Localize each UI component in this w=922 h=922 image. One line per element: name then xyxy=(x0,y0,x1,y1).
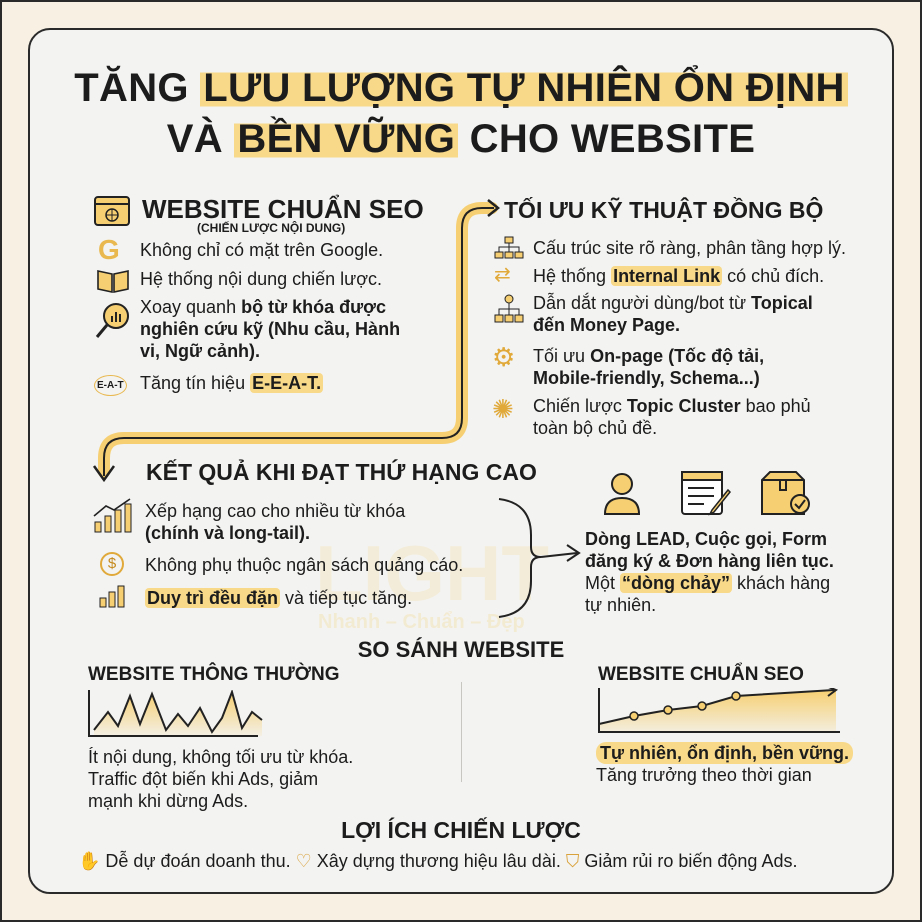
panel: kết quả: Không phụ thuộc ngân sách quảng cáo. xyxy=(145,555,463,575)
brace arrow xyxy=(498,498,581,618)
panel: website chuẩn seo compare: Tăng trưởng theo thời gian xyxy=(596,765,812,785)
panel: website chuẩn seo: vi, Ngữ cảnh). xyxy=(140,341,260,361)
panel: website thông thường: WEBSITE THÔNG THƯỜNG xyxy=(88,664,340,685)
panel: kết quả: Xếp hạng cao cho nhiều từ khóa xyxy=(145,501,405,521)
icon: small bars xyxy=(100,586,124,608)
heading: WEBSITE CHUẨN SEO xyxy=(142,194,424,224)
text: lead result: đăng ký & Đơn hàng liên tục. xyxy=(585,551,834,571)
panel: website thông thường xyxy=(88,662,353,811)
panel: website thông thường: mạnh khi dừng Ads. xyxy=(88,791,248,811)
panel: kết quả: (chính và long-tail). xyxy=(145,523,310,543)
icon: arrows: ⇄ xyxy=(494,264,511,286)
text: lead result: tự nhiên. xyxy=(585,595,656,615)
icon: hierarchy xyxy=(494,294,524,322)
panel: tối ưu kỹ thuật xyxy=(492,197,846,438)
icon: dollar: $ xyxy=(108,555,116,572)
benefits row: ✋ Dễ dự đoán doanh thu. ♡ Xây dựng thương hiệu lâu dài. ⛉ Giảm rủi ro biến động Ads. xyxy=(78,851,797,871)
icon: dollar xyxy=(100,552,124,576)
icon: EAT: E-A-T xyxy=(97,380,124,391)
panel: website chuẩn seo: Xoay quanh bộ từ khóa được xyxy=(140,297,386,317)
icon: box xyxy=(761,471,810,515)
icon: google: G xyxy=(98,234,120,265)
panel: website thông thường: Traffic đột biến khi Ads, giảm xyxy=(88,769,318,789)
panel: tối ưu kỹ thuật: Mobile-friendly, Schema...) xyxy=(533,368,760,388)
icon: browser xyxy=(94,196,130,226)
panel: website chuẩn seo compare: WEBSITE CHUẨN SEO xyxy=(598,664,804,685)
panel: tối ưu kỹ thuật: Tối ưu On-page (Tốc độ tải, xyxy=(533,346,764,366)
heading: KẾT QUẢ KHI ĐẠT THỨ HẠNG CAO xyxy=(146,459,537,485)
panel: tối ưu kỹ thuật: Cấu trúc site rõ ràng, phân tầng hợp lý. xyxy=(533,238,846,258)
icon: person xyxy=(604,473,640,515)
heading: TỐI ƯU KỸ THUẬT ĐỒNG BỘ xyxy=(504,197,823,223)
panel: tối ưu kỹ thuật: Chiến lược Topic Cluster bao phủ xyxy=(533,396,811,416)
panel: tối ưu kỹ thuật: đến Money Page. xyxy=(533,315,680,335)
panel: kết quả xyxy=(94,459,537,608)
panel: website chuẩn seo compare: Tự nhiên, ổn định, bền vững. xyxy=(600,743,849,763)
panel: tối ưu kỹ thuật: Hệ thống Internal Link có chủ đích. xyxy=(533,266,824,286)
panel: website chuẩn seo: Tăng tín hiệu E-E-A-T. xyxy=(140,373,321,393)
icon: sitemap xyxy=(494,236,524,258)
icon: growth bars xyxy=(94,498,132,532)
panel: website chuẩn seo xyxy=(94,194,424,396)
icon: EAT xyxy=(94,375,127,396)
text: lead result: Một “dòng chảy” khách hàng xyxy=(585,573,830,593)
panel: kết quả: Duy trì đều đặn và tiếp tục tăng. xyxy=(147,588,412,608)
icon: form xyxy=(681,471,731,516)
text: lead result xyxy=(585,529,834,615)
icon: book xyxy=(97,270,129,293)
panel: website thông thường: Ít nội dung, không tối ưu từ khóa. xyxy=(88,747,353,767)
panel: website chuẩn seo: nghiên cứu kỹ (Nhu cầu, Hành xyxy=(140,319,400,339)
watermark: LIGHT xyxy=(315,529,549,617)
panel: website chuẩn seo: (CHIẾN LƯỢC NỘI DUNG) xyxy=(197,221,345,235)
heading: lợi ích: LỢI ÍCH CHIẾN LƯỢC xyxy=(341,817,581,843)
text: lead result: Dòng LEAD, Cuộc gọi, Form xyxy=(585,529,827,549)
heading: so sánh: SO SÁNH WEBSITE xyxy=(358,637,564,662)
panel: website chuẩn seo: Hệ thống nội dung chiến lược. xyxy=(140,269,382,289)
icon: gear: ⚙ xyxy=(492,342,515,372)
title: TĂNG LƯU LƯỢNG TỰ NHIÊN ỔN ĐỊNH xyxy=(74,66,845,110)
chart: growth xyxy=(598,688,840,733)
icon: network: ✺ xyxy=(492,394,514,424)
text: VÀ BỀN VỮNG CHO WEBSITE xyxy=(167,117,755,161)
icons: lead types xyxy=(604,471,810,516)
chart: spiky xyxy=(88,690,263,737)
icon: magnifier xyxy=(96,303,129,338)
panel: website chuẩn seo compare xyxy=(596,662,853,785)
panel: tối ưu kỹ thuật: toàn bộ chủ đề. xyxy=(533,418,657,438)
panel: website chuẩn seo: Không chỉ có mặt trên Google. xyxy=(140,240,383,260)
flow path arrow: Nhanh – Chuẩn – Đẹp xyxy=(318,611,525,633)
panel: tối ưu kỹ thuật: Dẫn dắt người dùng/bot từ Topical xyxy=(533,293,813,313)
